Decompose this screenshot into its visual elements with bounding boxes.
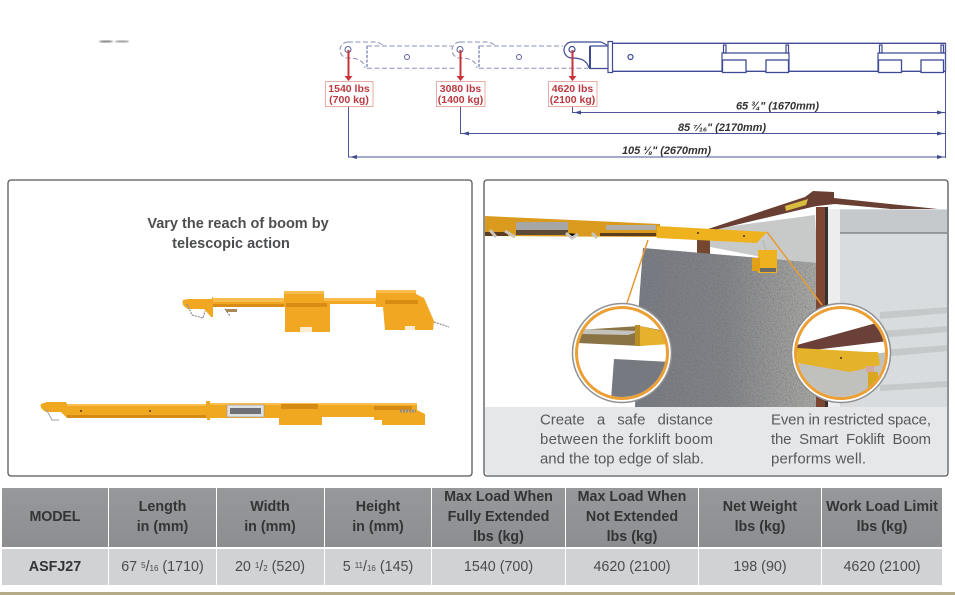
dimension lines: [348, 43, 946, 158]
table row ASFJ27: 2 (520): [263, 559, 305, 575]
heading: [147, 216, 329, 252]
table row ASFJ27: /: [363, 559, 367, 575]
table row ASFJ27: 16 (1710): [150, 559, 204, 575]
boom load diagram: [326, 42, 946, 159]
table row ASFJ27: 5: [343, 559, 351, 575]
table row ASFJ27: 20: [235, 559, 251, 575]
load callout 3080 lbs: 3080 lbs: [440, 83, 481, 95]
table row ASFJ27: 5: [141, 561, 146, 570]
table header: in (mm): [137, 519, 189, 535]
caption left: Create a safe distance: [540, 412, 713, 428]
table header: lbs (kg): [857, 519, 908, 535]
container post: [816, 207, 825, 407]
table row ASFJ27: ASFJ27: [29, 559, 81, 575]
table row ASFJ27: /: [259, 559, 263, 575]
dimension label 85 7/16: 85 ⁷⁄₁₆" (2170mm): [678, 122, 766, 134]
table header: Max Load When: [578, 489, 686, 505]
granite slab: [630, 245, 822, 410]
caption left: and the top edge of slab.: [540, 450, 704, 468]
load callout 1540 lbs: [326, 50, 373, 106]
caption right: the Smart Foklift Boom: [771, 431, 931, 448]
caption band: [484, 407, 948, 476]
load callout 1540 lbs: 1540 lbs: [328, 83, 370, 95]
table header: lbs (kg): [607, 529, 658, 545]
dimension label 65 3/4: 65 ¾" (1670mm): [736, 100, 819, 112]
photo: retracted boom: [183, 290, 449, 332]
caption right: Even in restricted space,: [771, 412, 931, 428]
table header: Width: [250, 499, 290, 515]
table header: MODEL: [30, 509, 81, 525]
panel: telescopic action: [8, 180, 472, 476]
table header: Not Extended: [586, 509, 678, 525]
dimension label 105 1/8: 105 ⅛" (2670mm): [622, 145, 711, 157]
load callout 4620 lbs: [548, 50, 597, 106]
forklift boom in photo: [484, 216, 777, 273]
table row ASFJ27: 1: [255, 561, 260, 570]
load callout 3080 lbs: (1400 kg): [438, 94, 483, 106]
container door: [828, 209, 948, 407]
table row ASFJ27: 67: [121, 559, 137, 575]
table row ASFJ27: 1540 (700): [464, 559, 533, 575]
table header: Length: [139, 499, 186, 515]
caption left: between the forklift boom: [540, 431, 713, 448]
table header: lbs (kg): [735, 519, 786, 535]
table header: Work Load Limit: [826, 499, 938, 515]
table row ASFJ27: 11: [355, 561, 364, 570]
load callout 4620 lbs: (2100 kg): [550, 94, 595, 106]
table row ASFJ27: 16 (145): [367, 559, 413, 575]
table header: [2, 488, 942, 547]
specification table: [2, 488, 942, 585]
load callout 4620 lbs: 4620 lbs: [552, 83, 593, 95]
container interior: [710, 215, 816, 263]
solid boom outline: [564, 42, 946, 72]
table header: in (mm): [244, 519, 296, 535]
photo scene: [484, 191, 948, 476]
table header: lbs (kg): [473, 529, 524, 545]
table row ASFJ27: 4620 (2100): [593, 559, 671, 575]
bottom accent bar: [0, 592, 955, 595]
table row ASFJ27: 4620 (2100): [843, 559, 921, 575]
table header: Height: [356, 499, 400, 515]
table header: Net Weight: [723, 499, 797, 515]
caption left: [540, 412, 713, 468]
photo: extended boom: [41, 401, 425, 425]
caption right: performs well.: [771, 450, 866, 468]
load callout 1540 lbs: (700 kg): [329, 94, 369, 106]
heading: Vary the reach of boom by: [147, 216, 329, 232]
table row ASFJ27: /: [146, 559, 150, 575]
container roof beams: [708, 191, 947, 231]
table row ASFJ27: 198 (90): [733, 559, 787, 575]
table header: Fully Extended: [448, 509, 549, 525]
detail circle left: [572, 304, 672, 402]
callout pointer lines: [627, 232, 822, 305]
caption right: [771, 412, 931, 468]
detail circle right: [792, 304, 890, 402]
load callout 3080 lbs: [436, 50, 485, 106]
smudge mark: [99, 40, 129, 42]
table row ASFJ27: [2, 549, 942, 585]
table header: in (mm): [352, 519, 404, 535]
extended boom ghost positions: [340, 42, 588, 68]
table header: Max Load When: [444, 489, 553, 505]
heading: telescopic action: [172, 236, 290, 252]
panel: use case photo: [484, 180, 948, 476]
